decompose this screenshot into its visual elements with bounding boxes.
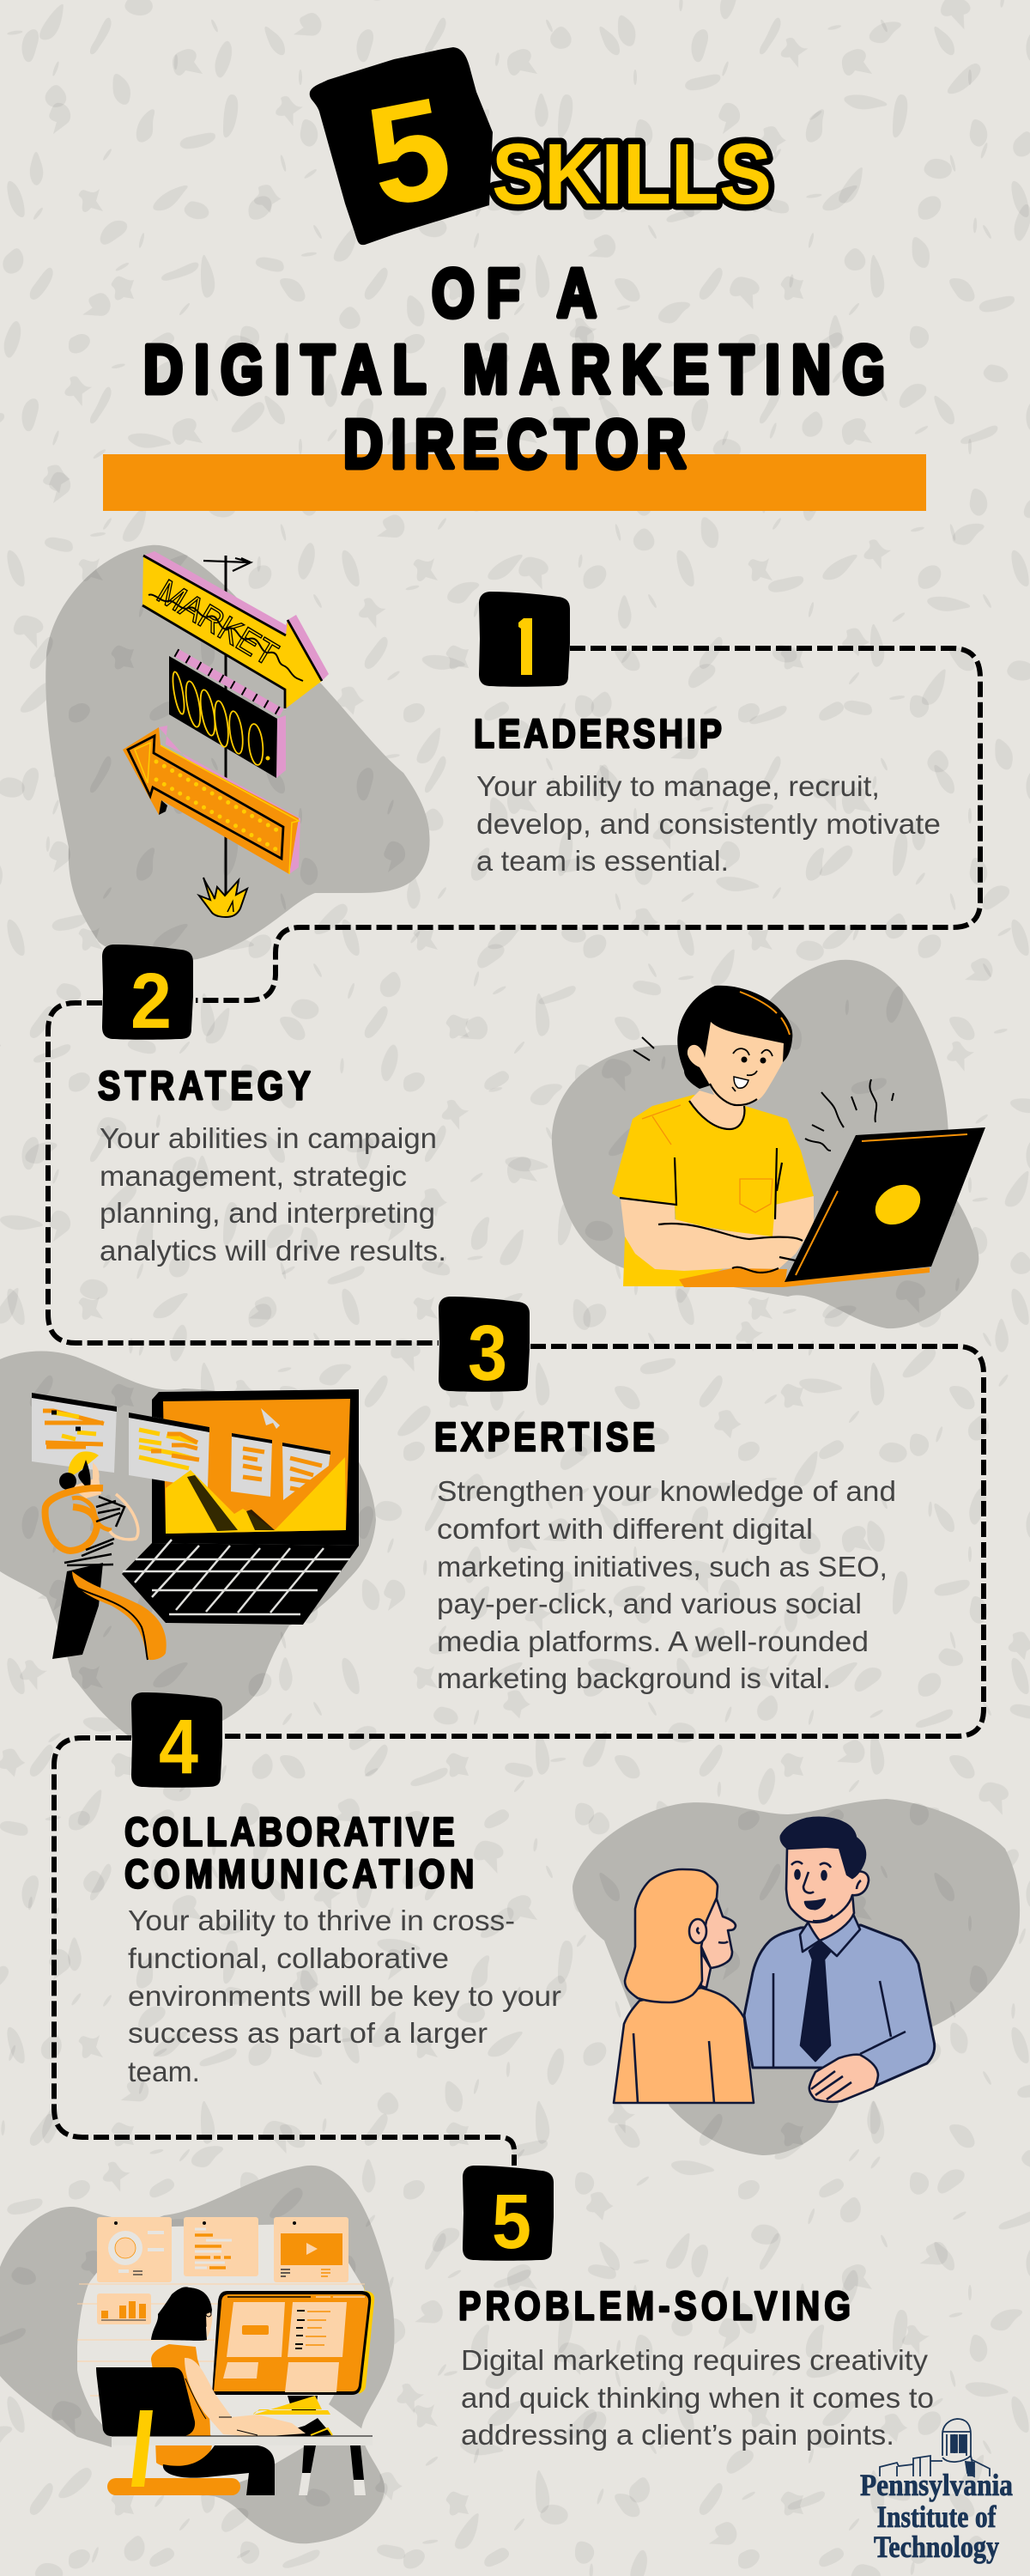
heading: of a: OF A [432,255,597,331]
number tile: 4: 4 [159,1704,198,1790]
dashed connector path [48,648,984,2166]
panel: strategy [98,945,985,1328]
heading: strategy: STRATEGY [98,1064,311,1109]
text: expertise body [437,1475,896,1694]
text: strategy body: analytics will drive results. [100,1235,446,1267]
number tile: 5: 5 [355,67,463,237]
text: problem-solving body [461,2344,934,2451]
number tile: 1 [479,592,570,687]
panel: problem-solving [0,2166,934,2543]
text: collaboration body: functional, collaborative [128,1942,449,1974]
logo: Pennsylvania Institute of Technology [860,2419,1013,2564]
title block [103,47,926,511]
text: institution name: Pennsylvania [860,2468,1013,2502]
panel: expertise [0,1297,896,1743]
number tile: 2: 2 [130,957,172,1045]
text: expertise body: marketing initiatives, such as SEO, [437,1551,888,1583]
heading: collaborative communication [124,1810,474,1897]
text: collaboration body: environments will be key to your [128,1980,561,2012]
blob [0,2166,395,2543]
number tile: 4 [131,1692,222,1790]
text: expertise body: media platforms. A well-rounded [437,1625,869,1657]
number tile: 3 [439,1297,530,1397]
text: collaboration body: team. [128,2056,200,2087]
icon: market signpost [123,551,329,917]
icon: two colleagues talking [614,1818,935,2103]
text: expertise body: pay-per-click, and various social [437,1588,862,1619]
text: problem-solving body: and quick thinking when it comes to [461,2382,934,2414]
heading: leadership: LEADERSHIP [474,712,722,756]
icon: woman at desktop computer [77,2217,374,2496]
blob [552,960,978,1328]
icon: woman at giant laptop [32,1389,359,1660]
text: strategy body: planning, and interpreting [100,1197,435,1229]
number tile: 5 [463,2166,554,2265]
number tile: 2 [102,945,193,1045]
text: strategy body: management, strategic [100,1160,407,1192]
text: strategy body [100,1122,446,1267]
heading: collaborative communication: COLLABORATIVE [124,1810,455,1855]
icon: campus building [880,2419,990,2476]
text: expertise body: marketing background is vital. [437,1662,831,1694]
blob [573,1799,1020,2155]
text: leadership body: develop, and consistently motivate [476,808,941,840]
icon: market signpost: MARKET [150,573,284,674]
heading: problem-solving: PROBLEM-SOLVING [458,2284,851,2329]
number tile: 5 [310,47,493,245]
heading: digital marketing: DIGITAL MARKETING [143,331,885,408]
heading: expertise: EXPERTISE [434,1415,655,1460]
blob [45,545,430,961]
text: collaboration body [128,1905,561,2087]
text: collaboration body: success as part of a larger [128,2017,488,2049]
text: expertise body: Strengthen your knowledge of and [437,1475,896,1507]
text: institution name: Technology [874,2530,999,2564]
text: collaboration body: Your ability to thrive in cross- [128,1905,515,1936]
text: problem-solving body: addressing a client’s pain points. [461,2419,894,2451]
text: institution name: Institute of [877,2500,997,2534]
number tile: 5: 5 [492,2179,531,2265]
text: leadership body: a team is essential. [476,845,729,877]
text: leadership body [476,770,941,877]
heading: collaborative communication: COMMUNICATION [124,1852,474,1897]
blob [0,1351,376,1743]
orange title bar [103,454,926,511]
heading: skills: SKILLS [492,126,772,222]
number tile: 3: 3 [468,1309,507,1397]
heading: director: DIRECTOR [343,406,686,483]
panel: collaborative communication [124,1692,1020,2155]
text: leadership body: Your ability to manage, recruit, [476,770,880,802]
text: problem-solving body: Digital marketing requires creativity [461,2344,929,2376]
icon: man at laptop [612,986,985,1287]
text: institution name [860,2468,1013,2564]
text: strategy body: Your abilities in campaign [100,1122,437,1154]
text: expertise body: comfort with different digital [437,1513,813,1545]
panel: leadership [45,545,941,961]
